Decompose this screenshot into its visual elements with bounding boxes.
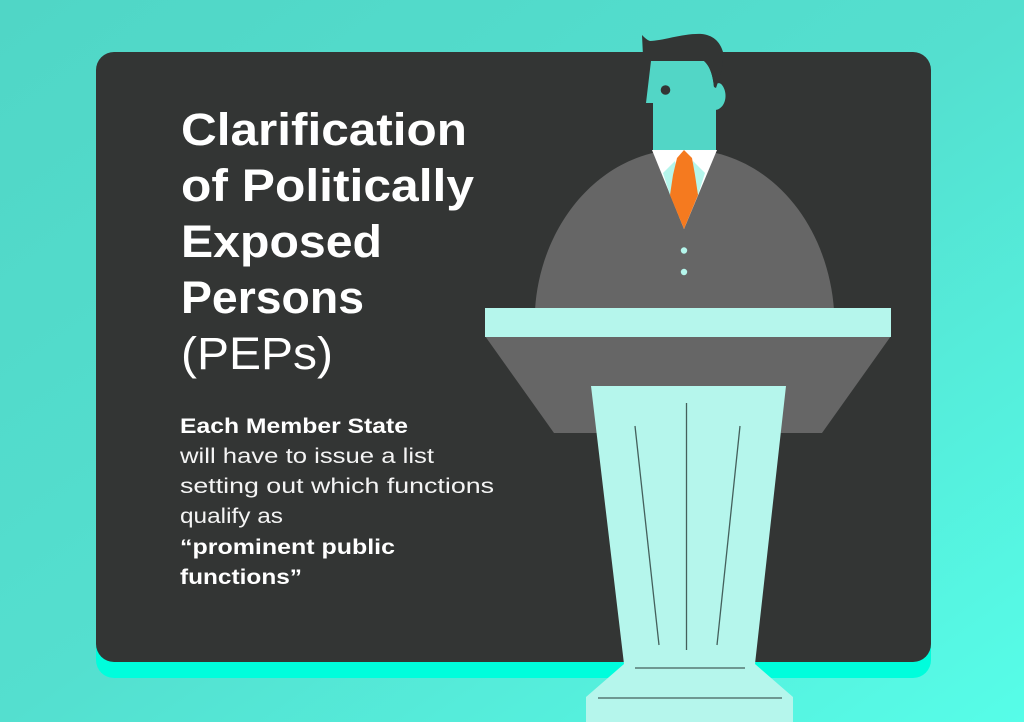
body text: will have to issue a list [179, 444, 434, 468]
orange tie [670, 150, 698, 229]
body text: setting out which functions [180, 474, 494, 498]
lectern column and base [586, 386, 793, 722]
body text: qualify as [180, 504, 283, 528]
column lines [598, 403, 782, 698]
button top [681, 247, 687, 254]
title: (PEPs) [181, 328, 333, 379]
lectern top [485, 308, 891, 337]
eye [661, 85, 670, 95]
shirt shadow left [663, 161, 684, 200]
lectern underside [485, 336, 891, 433]
hair [642, 34, 723, 88]
body text [179, 414, 494, 589]
body text: Each Member State [180, 414, 408, 438]
panel shadow [96, 600, 931, 678]
button bottom [681, 269, 687, 275]
figure: speaker [535, 34, 834, 310]
body: grey suit [535, 149, 834, 310]
shirt collar [652, 150, 717, 229]
title: Persons [181, 272, 364, 323]
shirt shadow right [684, 161, 705, 200]
lectern [485, 308, 891, 722]
title: Clarification [181, 104, 467, 155]
body text: “prominent public [180, 535, 395, 559]
title: Exposed [181, 216, 382, 267]
title [181, 104, 474, 379]
title: of Politically [181, 160, 474, 211]
body text: functions” [180, 565, 302, 589]
neck and face [646, 61, 716, 151]
dark panel [96, 52, 931, 662]
ear [713, 83, 726, 110]
